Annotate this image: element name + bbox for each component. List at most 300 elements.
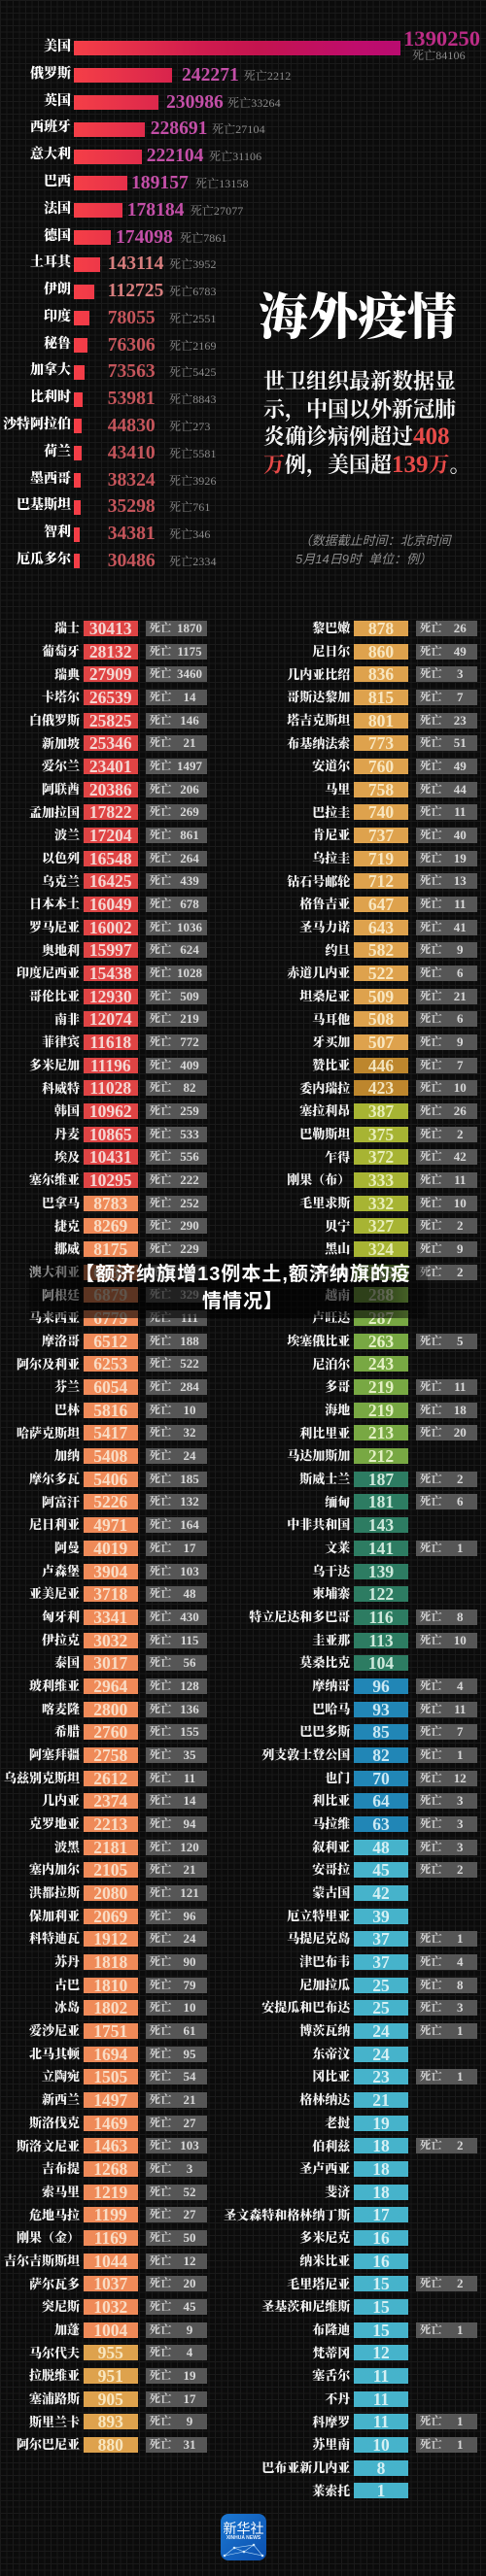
panel: right ranking table: 塞舌尔 [312,2368,350,2383]
overlay caption: headline band: 【额济纳旗增13例本土,额济纳旗的疫 [75,1264,411,1285]
panel: right ranking table: 乍得 [325,1150,350,1165]
panel: right ranking table: 黎巴嫩 [312,621,350,635]
panel: left ranking table: 1751 [93,2021,127,2041]
panel: left ranking table: 死亡 [150,1795,171,1807]
panel: left ranking table: 卢森堡 [42,1564,80,1578]
panel: right ranking table: 斐济 [325,2185,350,2199]
panel: right ranking table: 马耳他 [312,1012,350,1027]
panel: right ranking table: 纳米比亚 [299,2254,350,2268]
panel: right ranking table: 布隆迪 [312,2322,350,2337]
panel: right ranking table: 387 [368,1102,394,1121]
row: 墨西哥 [30,470,217,491]
panel: right ranking table: 3 [457,1793,464,1808]
panel: left ranking table: 保加利亚 [29,1909,80,1923]
panel: left ranking table: 死亡 [150,2025,171,2037]
panel: left ranking table: 希腊 [54,1724,80,1739]
panel: right ranking table: 死亡 [420,1381,442,1393]
panel: right ranking table: 死亡 [420,715,442,727]
panel: left ranking table: 26539 [89,688,132,707]
row: 墨西哥: 38324 [108,470,156,491]
panel: left ranking table: 20 [183,2276,196,2290]
panel: right ranking table: 15 [372,2321,390,2340]
panel: left ranking table: 188 [180,1334,199,1348]
panel: left ranking table: 12 [183,2254,196,2268]
row: 美国: 死亡84106 [412,49,466,62]
panel: left ranking table: 4 [187,2345,192,2359]
panel: left ranking table: 1004 [93,2321,127,2340]
panel: left ranking table: 死亡 [150,1566,171,1577]
row: 俄罗斯 [30,65,291,85]
panel: right ranking table: 海地 [325,1403,350,1417]
panel: right ranking table: 死亡 [420,1198,442,1209]
panel: left ranking table: 死亡 [150,1198,171,1209]
panel: right ranking table: 758 [368,780,394,799]
panel: right ranking table: 2 [457,2138,464,2152]
panel: right ranking table: 死亡 [420,967,442,979]
panel: left ranking table: 芬兰 [54,1379,80,1394]
panel: left ranking table: 1175 [177,644,202,659]
panel: left ranking table: 死亡 [150,2278,171,2289]
panel: left ranking table: 摩尔多瓦 [29,1472,80,1486]
panel: left ranking table: 死亡 [150,623,171,634]
row: 墨西哥: 死亡3926 [169,474,217,488]
panel: right ranking table: 24 [372,2021,390,2041]
row: 巴西: 死亡13158 [195,177,249,190]
panel: left ranking table: 219 [180,1011,199,1026]
panel: right ranking table: 圣马力诺 [299,920,350,934]
icon: Xinhua News logo: 新华社 [223,2520,263,2535]
panel: right ranking table: 摩纳哥 [312,1678,350,1693]
panel: left ranking table: 死亡 [150,692,171,703]
panel: left ranking table: 死亡 [150,2232,171,2244]
panel: left ranking table: 韩国 [54,1103,80,1118]
panel: left ranking table: 155 [180,1724,199,1739]
panel: right ranking table: 尼日尔 [312,644,350,659]
panel: right ranking table: 11 [454,897,466,911]
panel: right ranking table: 死亡 [420,1036,442,1048]
panel: left ranking table: 8269 [93,1216,127,1236]
panel: right ranking table: 马拉维 [312,1816,350,1831]
panel: left ranking table: 死亡 [150,1749,171,1761]
panel: left ranking table: 冰岛 [54,2000,80,2015]
panel: right ranking table: 287 [368,1308,394,1328]
panel: left ranking table: 90 [183,1954,196,1969]
panel: left ranking table: 死亡 [150,1105,171,1117]
row: 比利时: 死亡8843 [169,392,217,406]
row: 伊朗: 伊朗 [44,283,71,297]
panel: left ranking table: 5406 [93,1470,127,1489]
panel: right ranking table: 82 [372,1746,390,1765]
panel: left ranking table: 阿联酋 [42,782,80,797]
panel: left ranking table: 1037 [93,2274,127,2293]
panel: left ranking table: 死亡 [150,1336,171,1347]
panel: right ranking table: 8 [457,1610,464,1624]
panel: right ranking table: 2 [457,1472,464,1486]
row: 美国: 美国 [44,40,71,54]
panel: left ranking table: 孟加拉国 [29,805,80,820]
panel: left ranking table: 2181 [93,1838,127,1857]
panel: right ranking table: 509 [368,987,394,1006]
panel: left ranking table: 1505 [93,2067,127,2086]
panel: left ranking table: 死亡 [150,1818,171,1830]
panel: right ranking table: 安提瓜和巴布达 [261,2000,350,2015]
panel: right ranking table: 860 [368,642,394,661]
panel: right ranking table: 63 [372,1814,390,1834]
panel: left ranking table: 死亡 [150,2186,171,2198]
row: 法国 [44,200,243,220]
panel: right ranking table: 25 [372,1998,390,2017]
panel: left ranking table: 死亡 [150,1474,171,1485]
overlay caption: headline band: 情情况】 [202,1291,284,1312]
panel: right ranking table: 死亡 [420,2278,442,2289]
panel: left ranking table: 死亡 [150,1289,171,1301]
panel: left ranking table: 25346 [89,733,132,753]
panel: right ranking table: 9 [457,942,464,957]
panel: left ranking table: 死亡 [150,1129,171,1140]
panel: right ranking table: 牙买加 [312,1034,350,1049]
panel: right ranking table: 埃塞俄比亚 [287,1334,350,1348]
panel: left ranking table: 死亡 [150,1726,171,1738]
panel: left ranking table: 1497 [93,2090,127,2110]
panel: left ranking table: 死亡 [150,1887,171,1899]
panel: left ranking table: 880 [98,2435,123,2455]
row: 荷兰: 43410 [108,443,156,463]
panel: left ranking table: 死亡 [150,2416,171,2427]
panel: left ranking table: 27 [183,2207,196,2221]
panel: left ranking table: 24 [183,1448,196,1463]
panel: right ranking table: 中非共和国 [287,1517,350,1532]
panel: right ranking table: 格林纳达 [299,2092,350,2107]
panel: left ranking table: 北马其顿 [29,2047,80,2061]
panel: right ranking table: 19 [454,851,467,865]
panel: left ranking table: 死亡 [150,715,171,727]
panel: right ranking table: 多哥 [325,1379,350,1394]
panel: left ranking table: 立陶宛 [42,2069,80,2084]
panel: left ranking table: 马尔代夫 [29,2346,80,2360]
panel: right ranking table: 死亡 [420,1105,442,1117]
panel: left ranking table: 16049 [89,895,132,914]
panel: left ranking table: 索马里 [42,2185,80,2199]
row: 美国: 1390250 [403,26,480,51]
panel: right ranking table: 死亡 [420,737,442,749]
panel: right ranking table: 巴巴多斯 [299,1724,350,1739]
panel: right ranking table: 死亡 [420,2439,442,2451]
panel: left ranking table: 死亡 [150,1842,171,1853]
row: 俄罗斯: 俄罗斯 [30,67,71,82]
panel: right ranking table: 3 [457,2000,464,2015]
row: 巴基斯坦: 巴基斯坦 [17,498,71,513]
row: 厄瓜多尔 [17,551,217,571]
panel: right ranking table: 特立尼达和多巴哥 [249,1610,350,1624]
panel: left ranking table: 2080 [93,1883,127,1903]
panel: right ranking table: 塔吉克斯坦 [287,713,350,728]
panel: right ranking table: 死亡 [420,1611,442,1623]
panel: right ranking table: 死亡 [420,646,442,658]
panel: left ranking table: 12074 [89,1009,132,1029]
panel: left ranking table: 5408 [93,1446,127,1466]
panel: left ranking table: 死亡 [150,1405,171,1416]
panel: left ranking table: 14 [183,1793,196,1808]
row: 俄罗斯: 242271 [182,65,239,85]
panel: right ranking table: 332 [368,1194,394,1213]
panel: right ranking table: 93 [372,1700,390,1719]
panel: left ranking table: 1169 [94,2228,127,2248]
panel: right ranking table: 25 [372,1976,390,1995]
panel: right ranking table: 圣基茨和尼维斯 [261,2299,350,2314]
panel: left ranking table: 死亡 [150,2071,171,2083]
title: 海外疫情 [259,291,457,346]
panel: left ranking table: 1870 [177,621,202,635]
panel: right ranking table: 柬埔寨 [312,1586,350,1601]
row: 印度: 78055 [108,308,156,328]
panel: left ranking table: 南非 [54,1012,80,1027]
panel: left ranking table: 捷克 [54,1219,80,1234]
row: 法国: 法国 [44,202,71,217]
panel: right ranking table: 刚果（布） [287,1172,350,1187]
panel: right ranking table: 139 [368,1562,394,1581]
panel: right ranking table: 44 [454,782,467,797]
panel: left ranking table: 2760 [93,1722,127,1742]
panel: left ranking table: 喀麦隆 [42,1702,80,1716]
panel: left ranking table: 1268 [93,2159,127,2179]
panel: right ranking table: 死亡 [420,1336,442,1347]
panel: left ranking table: 128 [180,1678,199,1693]
panel: left ranking table: 14 [183,690,196,704]
panel: right ranking table: 塞拉利昂 [299,1103,350,1118]
panel: left ranking table: 121 [180,1885,199,1900]
panel: right ranking table: 死亡 [420,1474,442,1485]
panel: left ranking table: 409 [180,1058,199,1072]
panel: right ranking table: 死亡 [420,1060,442,1071]
panel: right ranking table: 42 [372,1883,390,1903]
row: 意大利 [30,146,261,166]
panel: right ranking table: 2 [457,1218,464,1233]
panel: right ranking table: 446 [368,1056,394,1075]
panel: left ranking table: 乌克兰 [42,874,80,889]
panel: right ranking table: 死亡 [420,875,442,887]
panel: left ranking table: 卡塔尔 [42,690,80,704]
panel: right ranking table: 11 [373,2390,389,2409]
panel: right ranking table: 15 [372,2297,390,2317]
panel: right ranking table: 13 [454,873,467,888]
row: 西班牙 [30,119,265,139]
panel: left ranking table: 死亡 [150,1267,171,1278]
panel: left ranking table: 1810 [93,1976,127,1995]
panel: right ranking table: 333 [368,1170,394,1190]
row: 印度: 死亡2551 [169,312,217,325]
panel: left ranking table: 3032 [93,1631,127,1650]
panel: right ranking table: 7 [457,1058,464,1072]
panel: right ranking table: 斯威士兰 [299,1472,350,1486]
panel: left ranking table: 164 [180,1517,199,1532]
panel: left ranking table: 2800 [93,1700,127,1719]
text block: summary: 炎确诊病例超过408 [263,424,450,450]
row: 秘鲁: 秘鲁 [44,337,71,352]
panel: right ranking table: 死亡 [420,1174,442,1186]
panel: left ranking table: 48 [183,1586,196,1601]
panel: right ranking table: 莱索托 [312,2484,350,2498]
panel: right ranking table: 324 [368,1239,394,1259]
panel: left ranking table: 115 [181,1633,198,1647]
panel: left ranking table: 1818 [93,1952,127,1972]
panel: left ranking table: 6879 [93,1285,127,1305]
panel: right ranking table: 死亡 [420,1842,442,1853]
panel: left ranking table: 死亡 [150,2370,171,2382]
panel: right ranking table: 乌干达 [312,1564,350,1578]
panel: right ranking table: 列支敦士登公国 [261,1747,350,1762]
panel: right ranking table: 科摩罗 [312,2415,350,2429]
panel: right ranking table: 522 [368,964,394,983]
panel: left ranking table: 死亡 [150,761,171,772]
panel: left ranking table: 吉布提 [42,2161,80,2176]
row: 沙特阿拉伯: 死亡273 [169,420,211,433]
panel: left ranking table: 瑞典 [54,666,80,682]
panel: left ranking table: 死亡 [150,1611,171,1623]
row: 厄瓜多尔: 死亡2334 [169,555,217,568]
panel: left ranking table: 印度尼西亚 [17,966,80,980]
panel: right ranking table: 蒙古国 [312,1885,350,1900]
panel: left ranking table: 222 [180,1172,199,1187]
panel: left ranking table: 摩洛哥 [42,1334,80,1348]
panel: right ranking table: 212 [368,1446,394,1466]
row: 巴基斯坦: 死亡761 [169,500,211,514]
row: 美国 [44,26,480,62]
panel: left ranking table: 269 [180,804,199,819]
panel: right ranking table: 11 [454,1379,466,1394]
panel: right ranking table: 巴勒斯坦 [299,1127,350,1141]
panel: left ranking table: 206 [180,782,199,797]
row: 厄瓜多尔: 30486 [108,551,156,571]
panel: left ranking table: 430 [180,1610,199,1624]
panel: right ranking table: 11 [454,1702,466,1716]
panel: left ranking table: 马来西亚 [29,1310,80,1325]
row: 土耳其 [30,254,217,274]
panel: left ranking table: 哥伦比亚 [29,989,80,1003]
panel: left ranking table: 死亡 [150,1427,171,1439]
panel: right ranking table: 801 [368,711,394,730]
panel: right ranking table: 死亡 [420,1129,442,1140]
panel: left ranking table: 772 [180,1034,199,1049]
panel: left ranking table: 葡萄牙 [42,644,80,659]
text block: data note [295,533,452,565]
panel: left ranking table: 新西兰 [42,2092,80,2107]
panel: left ranking table: 678 [180,897,199,911]
panel: right ranking table: 死亡 [420,1956,442,1968]
panel: left ranking table: 死亡 [150,1635,171,1646]
panel: left ranking table: 死亡 [150,737,171,749]
panel: left ranking table: 日本本土 [29,897,80,911]
panel: right ranking table: 圭亚那 [312,1633,350,1647]
panel: right ranking table: 582 [368,940,394,960]
panel: right ranking table: 死亡 [420,1427,442,1439]
panel: left ranking table: 死亡 [150,1151,171,1163]
panel: right ranking table: 厄立特里亚 [287,1909,350,1923]
panel: right ranking table: 19 [372,2114,390,2133]
panel: left ranking table: 死亡 [150,1933,171,1945]
panel: right ranking table: 死亡 [420,1795,442,1807]
panel: left ranking table: 死亡 [150,1588,171,1600]
panel: right ranking table: 格鲁吉亚 [299,897,350,911]
panel: left ranking table: 28132 [89,642,132,661]
panel: left ranking table: 1032 [93,2297,127,2317]
panel: left ranking table: 24 [183,1931,196,1946]
panel: right ranking table: 死亡 [420,2416,442,2427]
panel: left ranking table: 2213 [93,1814,127,1834]
text block: summary: 世卫组织最新数据显 [263,369,456,393]
panel: right ranking table: 18 [372,2183,390,2202]
panel: right ranking table: 11 [373,2366,389,2386]
panel: right ranking table: 16 [372,2228,390,2248]
panel: right ranking table: 也门 [325,1771,350,1785]
panel: right ranking table: 1 [457,2322,464,2337]
panel: right ranking table: 津巴布韦 [299,1954,350,1969]
row: 巴西: 巴西 [44,175,71,189]
panel: left ranking table: 新加坡 [42,736,80,751]
panel: left ranking table: 25825 [89,711,132,730]
panel: right ranking table: 48 [372,1838,390,1857]
panel: left ranking table: 死亡 [150,898,171,910]
panel: right ranking table: 1 [377,2481,385,2500]
panel: right ranking table: 死亡 [420,761,442,772]
panel: left ranking table: 死亡 [150,1496,171,1508]
row: 荷兰: 死亡5581 [169,447,217,460]
panel: left ranking table: 1497 [177,759,202,773]
panel: right ranking table: 死亡 [420,2025,442,2037]
row: 意大利: 222104 [147,146,203,166]
panel: left ranking table: 阿尔及利亚 [17,1357,80,1372]
panel: right ranking table: 尼泊尔 [312,1357,350,1372]
panel: right ranking table: 327 [368,1216,394,1236]
panel: right ranking table: 3 [457,1840,464,1854]
panel: left ranking table: 6989 [93,1263,127,1282]
panel: right ranking table: 773 [368,733,394,753]
panel: right ranking table: 1 [457,1747,464,1762]
panel: right ranking table: 死亡 [420,830,442,841]
panel: right ranking table: 21 [454,989,467,1003]
panel: right ranking table: 死亡 [420,1243,442,1255]
panel: left ranking table: 103 [180,1564,199,1577]
panel: right ranking table: 马达加斯加 [287,1448,350,1463]
panel: left ranking table: 9 [187,2322,192,2337]
panel: right ranking table: 96 [372,1677,390,1696]
panel: left ranking table: 泰国 [54,1655,80,1670]
row: 英国: 英国 [44,94,71,109]
panel: right ranking table: 2 [457,1265,464,1279]
panel: left ranking table: 79 [183,1978,196,1992]
panel: left ranking table: 3904 [93,1562,127,1581]
panel: left ranking table: 8175 [93,1239,127,1259]
panel: left ranking table: 132 [180,1494,199,1508]
panel: left ranking table: 1469 [93,2114,127,2133]
panel: left ranking table: 861 [180,828,199,842]
panel: left ranking table: 56 [183,1655,196,1670]
panel: right ranking table: 死亡 [420,2324,442,2336]
panel: left ranking table: 522 [180,1356,199,1371]
panel: left ranking table: 4019 [93,1539,127,1558]
panel: left ranking table: 252 [180,1196,199,1210]
panel: left ranking table: 哈萨克斯坦 [17,1426,80,1441]
panel: right ranking table: 372 [368,1147,394,1167]
panel: right ranking table: 49 [454,759,467,773]
row: 土耳其: 死亡3952 [169,257,217,271]
panel: right ranking table: 40 [454,828,467,842]
row: 德国: 德国 [44,229,71,244]
panel: left ranking table: 乌兹别克斯坦 [4,1771,80,1785]
row: 德国: 死亡7861 [180,231,227,245]
panel: right ranking table: 4 [457,1954,464,1969]
panel: left ranking table: 死亡 [150,2002,171,2014]
panel: right ranking table: 死亡 [420,944,442,956]
